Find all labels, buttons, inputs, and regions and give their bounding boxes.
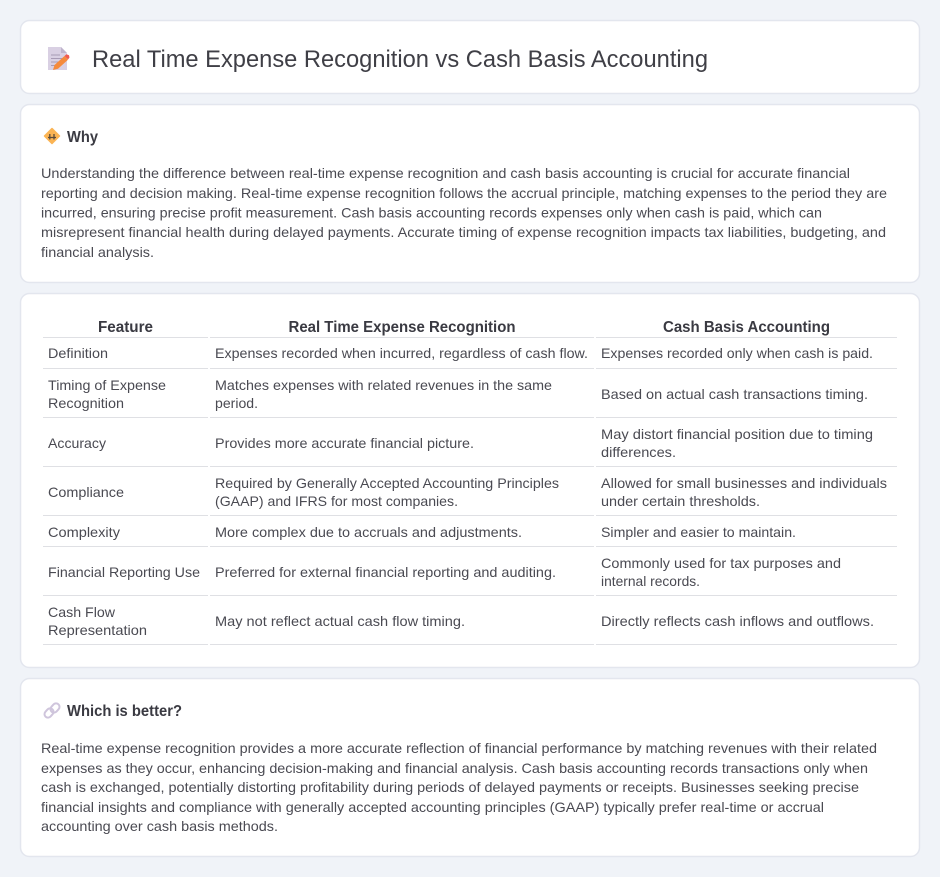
icon: warning diamond (44, 128, 60, 144)
row: accuracy: May distort financial position due to timing (601, 426, 873, 442)
text block: which is better paragraph: expenses as they occur, enhancing decision-making and financial analysis. Cash basis accounting records transactions only when (41, 760, 868, 776)
row: cash flow representation: Cash Flow (48, 604, 116, 620)
row: compliance: (GAAP) and IFRS for most companies. (215, 493, 458, 509)
row: complexity: Simpler and easier to maintain. (601, 524, 796, 540)
text block: which is better paragraph: Real-time expense recognition provides a more accurate reflection of financial performance by matching revenues with their related (41, 740, 877, 756)
panel: comparison table (20, 294, 920, 668)
table header: Feature (98, 319, 153, 336)
row: timing (48, 377, 868, 411)
row: accuracy: Provides more accurate financial picture. (215, 435, 474, 451)
icon: document with pencil (48, 47, 70, 70)
row: compliance: Allowed for small businesses and individuals (601, 475, 887, 491)
row: financial reporting use: Commonly used for tax purposes and (601, 555, 841, 571)
row: compliance: under certain thresholds. (601, 493, 760, 509)
panel: title header (20, 20, 920, 94)
icon: link (43, 702, 61, 719)
row: financial reporting use: Financial Reporting Use (48, 564, 200, 580)
row: complexity: More complex due to accruals and adjustments. (215, 524, 522, 540)
text block: which is better paragraph: cash is exchanged, potentially distorting profitability during periods of delayed payments or receipts. Businesses seeking precise (41, 779, 859, 795)
panel: which is better (20, 678, 920, 856)
row: complexity: Complexity (48, 524, 120, 540)
row: cash flow representation: Representation (48, 622, 147, 638)
row: definition: Definition (48, 345, 108, 361)
row: accuracy: differences. (601, 444, 676, 460)
row: timing: Matches expenses with related revenues in the same (215, 377, 552, 393)
text block: which is better paragraph (41, 740, 877, 834)
text block: why paragraph: misrepresent financial health during delayed payments. Accurate timing of expense recognition impacts tax liabilities, budgeting, and (41, 224, 886, 240)
table header (98, 319, 830, 336)
row: timing: Recognition (48, 395, 124, 411)
row: compliance (48, 475, 887, 509)
row: compliance: Compliance (48, 484, 124, 500)
row: cash flow representation (48, 604, 874, 638)
row: compliance: Required by Generally Accepted Accounting Principles (215, 475, 559, 491)
row: cash flow representation: Directly reflects cash inflows and outflows. (601, 613, 874, 629)
row: cash flow representation: May not reflect actual cash flow timing. (215, 613, 465, 629)
row: accuracy (48, 426, 873, 460)
panel: why (20, 104, 920, 282)
text block: why paragraph: Understanding the difference between real-time expense recognition and cash basis accounting is crucial for accurate financial (41, 165, 850, 181)
title: Real Time Expense Recognition vs Cash Basis Accounting (92, 46, 708, 73)
row: timing: period. (215, 395, 258, 411)
row: definition: Expenses recorded only when cash is paid. (601, 345, 873, 361)
text block: why paragraph: reporting and decision making. Real-time expense recognition follows the accrual principle, matching expenses to the period they are (41, 185, 887, 201)
text block: why paragraph (41, 165, 887, 260)
row: timing: Timing of Expense (48, 377, 166, 393)
row: financial reporting use: internal records. (601, 573, 700, 589)
table header: Real Time Expense Recognition (288, 319, 516, 336)
text block: why paragraph: incurred, ensuring precise profit measurement. Cash basis accounting records expenses only when cash is paid, which can (41, 204, 822, 220)
row: complexity (48, 524, 796, 540)
row: accuracy: Accuracy (48, 435, 106, 451)
row: financial reporting use: Preferred for external financial reporting and auditing. (215, 564, 556, 580)
text block: which is better paragraph: accounting over cash basis methods. (41, 818, 278, 834)
table header: Cash Basis Accounting (663, 319, 830, 336)
table rules (43, 337, 897, 645)
row: timing: Based on actual cash transactions timing. (601, 386, 868, 402)
text block: why paragraph: financial analysis. (41, 244, 154, 260)
text block: which is better paragraph: financial insights and compliance with generally accepted accounting principles (GAAP) typically prefer real-time or accrual (41, 799, 824, 815)
heading: which is better: Which is better? (67, 703, 182, 720)
row: definition: Expenses recorded when incurred, regardless of cash flow. (215, 345, 588, 361)
row: financial reporting use (48, 555, 841, 589)
row: definition (48, 345, 873, 361)
heading: why: Why (67, 129, 98, 146)
